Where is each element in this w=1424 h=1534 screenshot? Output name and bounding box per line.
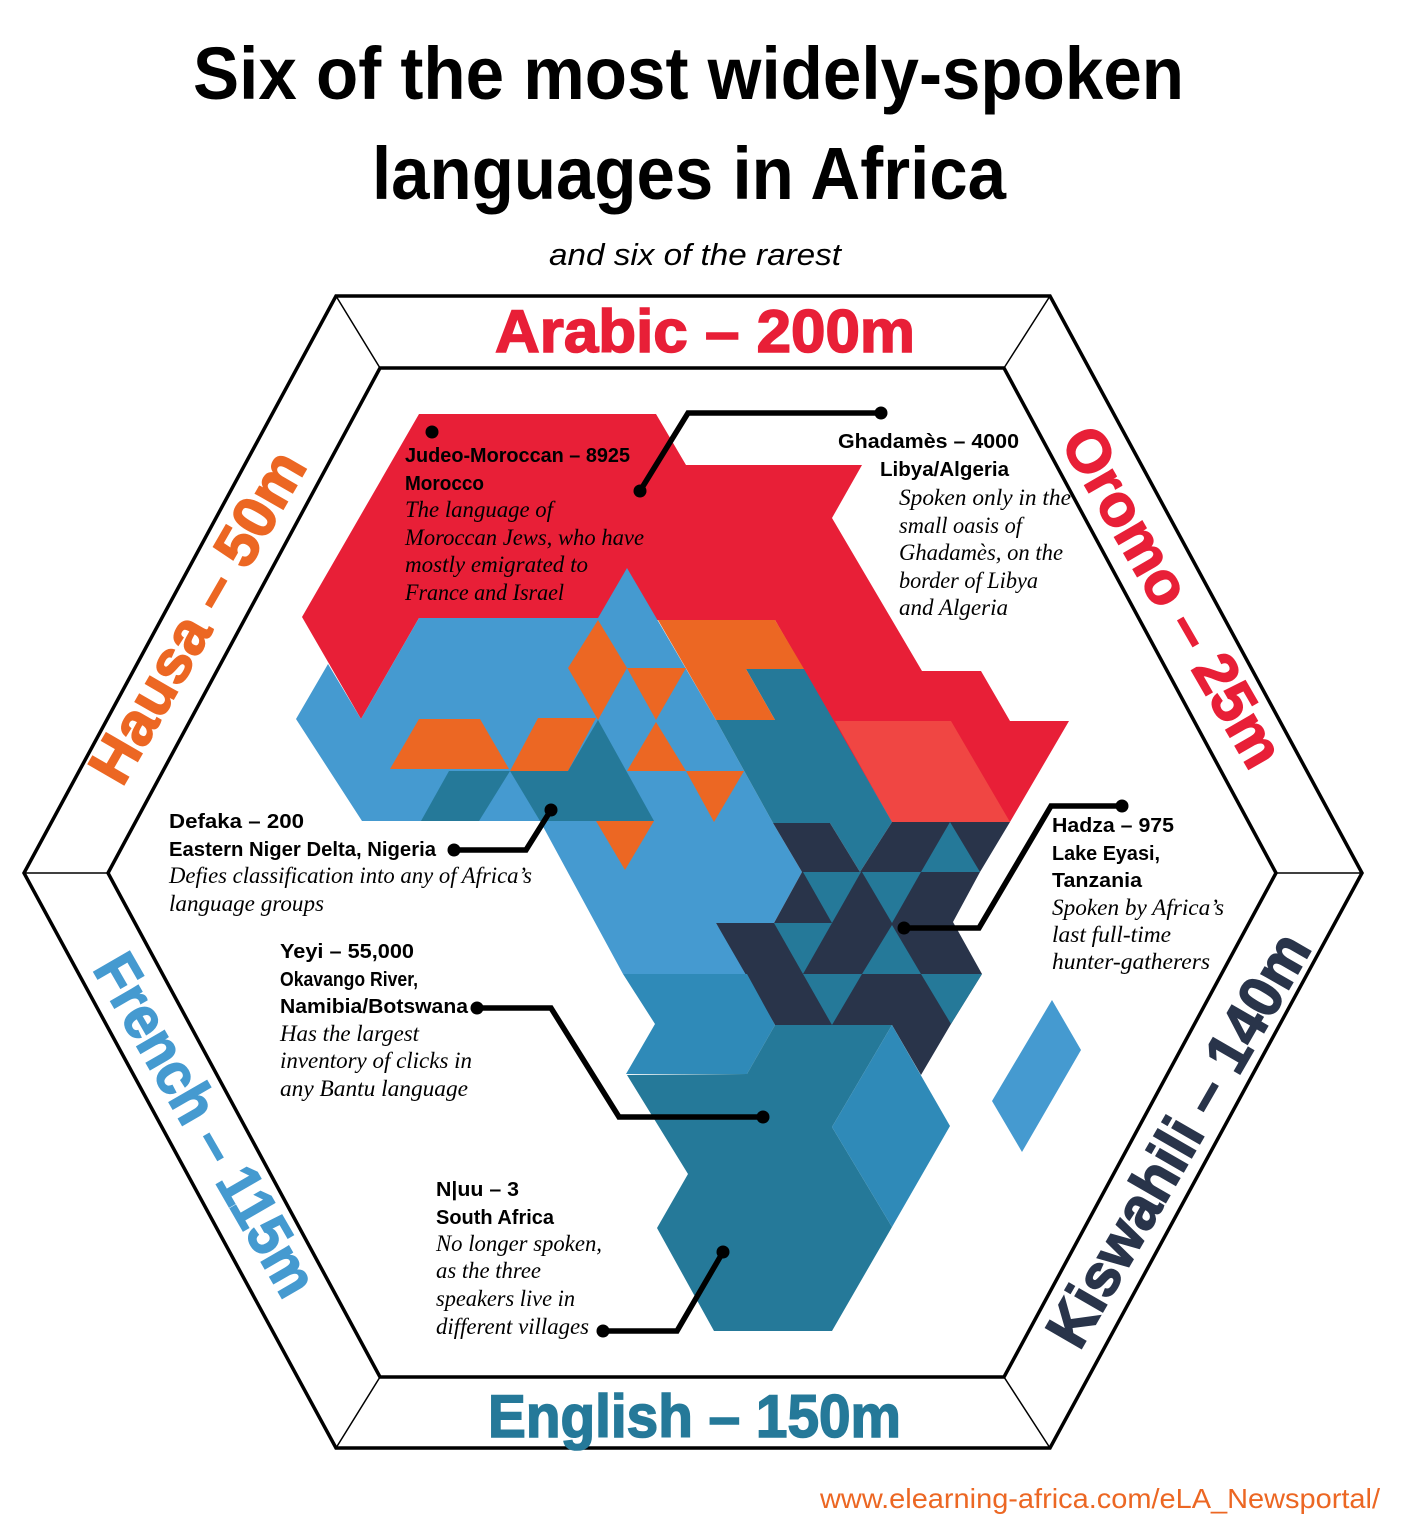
text: Yeyi: Namibia/Botswana (280, 996, 469, 1018)
text: Yeyi (279, 941, 472, 1101)
text: Hadza: Tanzania (1052, 870, 1143, 892)
text: Ghadamès: and Algeria (899, 595, 1008, 620)
text: N|uu: No longer spoken, (435, 1231, 602, 1256)
region: Hausa west triangles (390, 620, 744, 870)
region: English triangles (774, 822, 982, 1025)
text: Judeo-Moroccan: Moroccan Jews, who have (404, 525, 644, 550)
text: Ghadamès: small oasis of (899, 513, 1026, 538)
label: French: French – 115m (81, 942, 331, 1308)
text: Defaka: Defies classification into any of Africa’s (168, 863, 532, 888)
title (193, 32, 1184, 215)
text: N|uu: speakers live in (436, 1286, 575, 1311)
text: N|uu: N|uu – 3 (436, 1179, 519, 1201)
text: Judeo-Moroccan: France and Israel (404, 580, 564, 605)
text: Ghadamès (838, 431, 1071, 620)
region: French south-east (832, 1025, 950, 1227)
text: N|uu (435, 1179, 602, 1339)
text: Defaka (168, 811, 532, 916)
text: Judeo-Moroccan (404, 445, 644, 605)
text: Ghadamès: Spoken only in the (899, 485, 1071, 510)
map of Africa (296, 414, 1081, 1331)
text: N|uu: different villages (436, 1314, 589, 1339)
label: English: English – 150m (488, 1383, 901, 1450)
title: Six of the most widely-spoken (193, 32, 1184, 115)
text: Judeo-Moroccan: mostly emigrated to (405, 552, 588, 577)
label: Kiswahili: Kiswahili – 140m (1033, 921, 1324, 1358)
text: N|uu: as the three (436, 1258, 541, 1283)
label: Arabic: Arabic – 200m (495, 298, 915, 365)
text: Ghadamès: Ghadamès – 4000 (838, 431, 1019, 453)
text: Hadza: Spoken by Africa’s (1052, 895, 1224, 920)
text: Judeo-Moroccan: Judeo-Moroccan – 8925 (405, 445, 630, 467)
text: Hadza (1052, 815, 1224, 974)
text: Ghadamès: Ghadamès, on the (899, 540, 1063, 565)
region: Arabic north (302, 414, 1069, 822)
text: Yeyi: Has the largest (279, 1021, 420, 1046)
text: Defaka: Eastern Niger Delta, Nigeria (169, 839, 437, 861)
source url: www.elearning-africa.com/eLA_Newsportal/ (819, 1483, 1380, 1514)
text: Defaka: language groups (169, 891, 324, 916)
hexagon frame (24, 296, 1362, 1448)
region: Madagascar (992, 1000, 1081, 1152)
text: Ghadamès: border of Libya (899, 568, 1038, 593)
leader lines (454, 413, 1122, 1331)
text: Defaka: Defaka – 200 (169, 811, 304, 833)
text: Judeo-Moroccan: The language of (405, 497, 557, 522)
text: Hadza: hunter-gatherers (1052, 949, 1210, 974)
region: English west (421, 720, 654, 821)
region: Oromo horn (835, 721, 1010, 822)
text: Ghadamès: Libya/Algeria (880, 459, 1010, 481)
subtitle: and six of the rarest (549, 237, 842, 272)
text: Yeyi: any Bantu language (280, 1076, 468, 1101)
label: Hausa: Hausa – 50m (75, 439, 319, 795)
region: Hausa north-east (658, 620, 804, 720)
text: Hadza: Hadza – 975 (1052, 815, 1174, 837)
text: Hadza: Lake Eyasi, (1052, 843, 1160, 865)
text: N|uu: South Africa (436, 1207, 555, 1229)
label: Oromo: Oromo – 25m (1048, 415, 1297, 779)
text: Yeyi: inventory of clicks in (280, 1048, 472, 1073)
text: Hadza: last full-time (1052, 922, 1171, 947)
title: languages in Africa (372, 132, 1007, 215)
text: Yeyi: Okavango River, (280, 969, 418, 991)
region: English east (716, 669, 892, 872)
leader dots (426, 406, 1128, 1338)
text: Yeyi: Yeyi – 55,000 (280, 941, 414, 963)
text: Judeo-Moroccan: Morocco (405, 473, 484, 495)
region: Kiswahili east (716, 822, 1010, 1075)
region: English south (627, 1025, 892, 1331)
region: French west (296, 568, 802, 974)
region: French central (623, 974, 775, 1074)
